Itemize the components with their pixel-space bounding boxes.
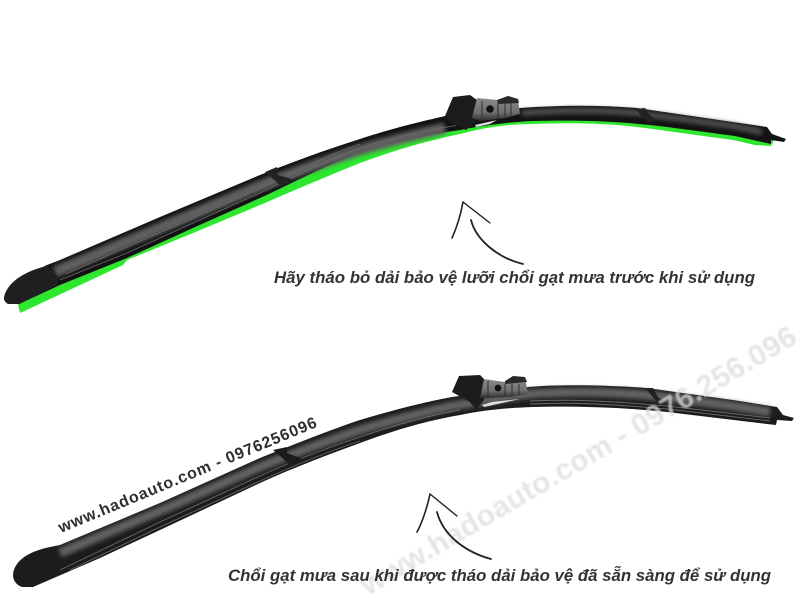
blade rails — [60, 400, 770, 570]
blade body — [4, 106, 786, 304]
blade highlight — [60, 392, 770, 553]
bottom arrow — [417, 494, 491, 559]
top arrow — [452, 202, 523, 264]
watermark: diagonal site and phone: www.hadoauto.com - 0976.256.096 — [354, 320, 800, 600]
right section highlight — [522, 111, 762, 132]
bottom caption: Chổi gạt mưa sau khi được tháo dải bảo vệ đã sẵn sàng để sử dụng — [228, 565, 771, 585]
top connector — [452, 375, 528, 410]
mid clip — [273, 447, 303, 465]
green protective strip — [17, 115, 774, 313]
top connector — [445, 95, 520, 130]
right clip — [645, 388, 664, 402]
blade highlight — [55, 128, 445, 272]
mid clip — [265, 167, 295, 185]
top wiper blade with green protective strip — [4, 95, 786, 313]
blade body — [13, 385, 794, 587]
bottom wiper blade — [13, 375, 794, 587]
top caption: Hãy tháo bỏ dải bảo vệ lưỡi chổi gạt mưa trước khi sử dụng — [274, 269, 755, 287]
site and phone label: www.hadoauto.com - 0976256096 — [55, 415, 319, 537]
end cap — [4, 265, 58, 304]
blade rails — [60, 125, 460, 280]
right clip — [636, 108, 656, 123]
